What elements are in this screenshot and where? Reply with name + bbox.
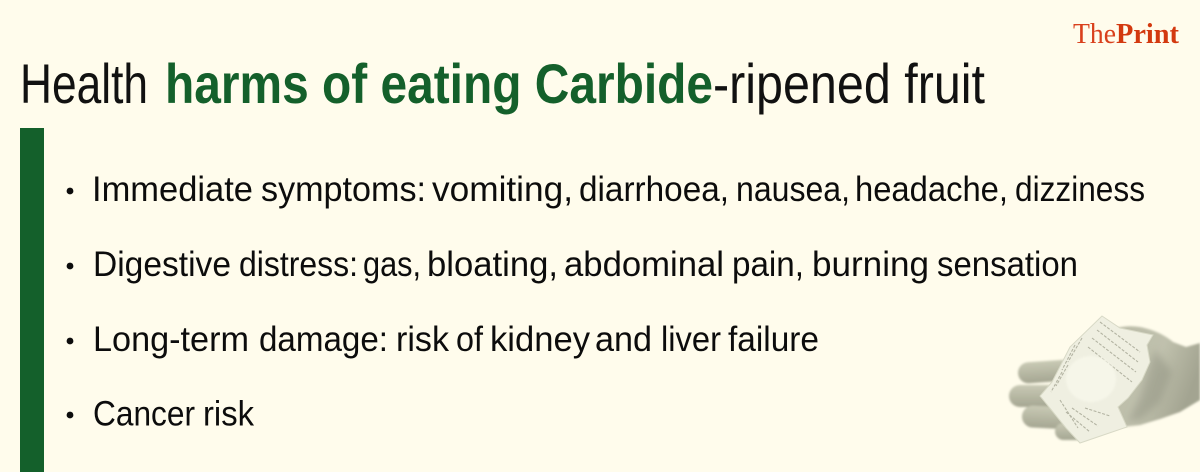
bullet: digestive distress: pain, — [732, 245, 804, 284]
title: -ripened fruit — [713, 52, 985, 115]
hand — [1009, 326, 1200, 440]
paper packet — [1040, 316, 1153, 443]
bullet: long-term damage: risk — [396, 320, 449, 359]
bullet: digestive distress: distress: — [239, 245, 358, 284]
bullet: digestive distress: bloating, — [427, 245, 558, 284]
bullet: digestive distress: Digestive — [93, 245, 231, 284]
bullet: immediate symptoms: diarrhoea, — [579, 170, 729, 209]
icon: hand holding paper packet of carbide — [1009, 316, 1200, 443]
bullet: digestive distress: abdominal — [564, 245, 724, 284]
bullet: cancer risk — [67, 394, 254, 434]
bullet: cancer risk: risk — [203, 394, 254, 434]
bullet: immediate symptoms: symptoms: — [261, 170, 426, 209]
bullet: long-term damage: failure — [728, 320, 819, 359]
title — [20, 52, 985, 115]
bullet: long-term damage: and — [595, 320, 652, 359]
bullet: long-term damage — [67, 320, 819, 359]
bullet: long-term damage: of — [456, 320, 483, 359]
logo: ThePrint: Print — [1116, 18, 1179, 50]
bullet: immediate symptoms — [67, 170, 1145, 209]
bullet: long-term damage: Long-term — [93, 320, 249, 359]
bullet: digestive distress: sensation — [937, 245, 1078, 284]
bullet: immediate symptoms: nausea, — [736, 170, 850, 209]
bullet: immediate symptoms: vomiting, — [432, 170, 573, 209]
bullet list — [67, 170, 1145, 434]
bullet: long-term damage: liver — [661, 320, 721, 359]
bullet: long-term damage: kidney — [490, 320, 590, 359]
bullet: digestive distress — [67, 245, 1078, 284]
green accent bar — [20, 128, 44, 472]
logo: ThePrint: The — [1073, 18, 1116, 50]
bullet: immediate symptoms: Immediate — [92, 170, 253, 209]
bullet: long-term damage: damage: — [259, 320, 388, 359]
title: harms of eating Carbide — [165, 52, 713, 115]
bullet: immediate symptoms: headache, — [855, 170, 1008, 209]
logo: ThePrint — [1073, 18, 1179, 50]
bullet: cancer risk: Cancer — [93, 394, 195, 434]
bullet: immediate symptoms: dizziness — [1015, 170, 1145, 209]
bullet: digestive distress: burning — [812, 245, 929, 284]
carbide powder — [1066, 356, 1116, 402]
bullet: digestive distress: gas, — [363, 245, 421, 284]
title: Health — [20, 52, 148, 115]
